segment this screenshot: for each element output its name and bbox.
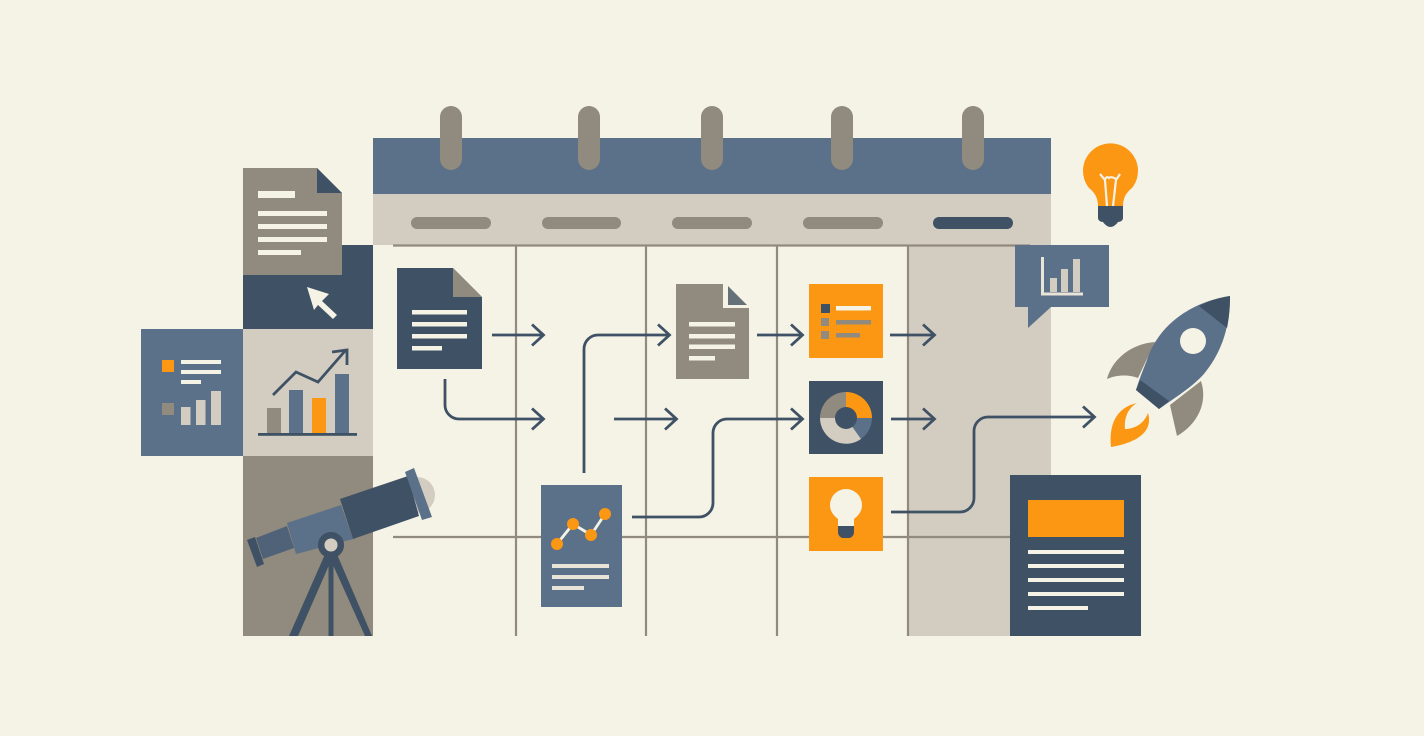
tile: orange lightbulb: [809, 477, 883, 551]
rocket right fin: [1170, 381, 1203, 436]
icon: speech bubble chart: [1015, 245, 1109, 328]
rocket body: [1136, 296, 1230, 409]
arrow: report up to notes: [584, 324, 670, 473]
panel: left mosaic: [141, 168, 373, 636]
document: line chart report: [541, 485, 622, 607]
arrow: report to donut: [632, 408, 802, 517]
calendar grid lines: [393, 245, 1030, 636]
rocket left fin: [1107, 342, 1155, 379]
icon: rocket: [1107, 296, 1230, 447]
document: navy brief: [397, 268, 482, 369]
calendar weekday band: [373, 194, 1051, 245]
icon: lightbulb: [1083, 143, 1138, 227]
rocket nose: [1199, 296, 1230, 328]
taupe document tile: [243, 168, 342, 275]
arrow: middle row: [614, 408, 676, 430]
flow arrows: [445, 324, 1094, 517]
arrow: notes to checklist: [757, 324, 802, 346]
tile: orange checklist: [809, 284, 883, 358]
arrow: bulb to rocket: [891, 406, 1094, 512]
icon: telescope: [247, 468, 435, 636]
slate stats tile: [141, 329, 243, 456]
taupe telescope tile: [243, 456, 373, 636]
document: taupe notes: [676, 284, 749, 379]
document: navy report: [1010, 475, 1141, 636]
beige growth chart tile: [243, 329, 373, 456]
calendar weekday pills: [411, 217, 1013, 229]
panel: calendar: [373, 106, 1051, 636]
calendar highlighted column: [908, 245, 1051, 636]
rocket tail band: [1136, 380, 1169, 409]
arrow: donut onward: [891, 408, 934, 430]
rocket flame: [1111, 403, 1149, 447]
rocket window: [1180, 328, 1206, 354]
arrow: checklist onward: [890, 324, 934, 346]
navy cursor tile: [243, 245, 373, 329]
arrow: brief to next step: [492, 324, 544, 346]
calendar header bar: [373, 138, 1051, 194]
calendar binder rings: [440, 106, 984, 170]
tile: navy donut chart: [809, 381, 883, 454]
arrow: brief down and right: [445, 379, 544, 430]
